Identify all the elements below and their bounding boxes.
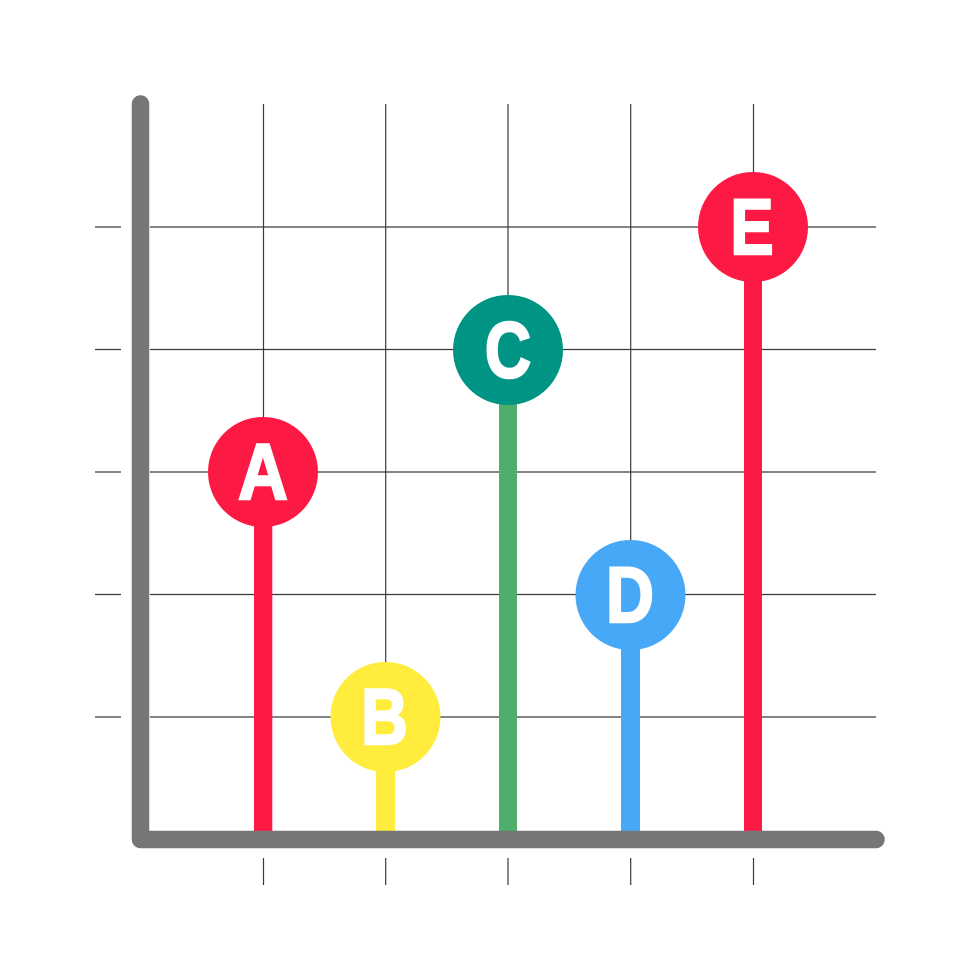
marker D	[576, 540, 686, 650]
bar E	[744, 227, 762, 832]
axes	[140, 104, 876, 840]
marker C: C	[485, 307, 531, 395]
marker A	[208, 417, 318, 527]
marker A: A	[238, 428, 288, 516]
marker C	[453, 295, 563, 405]
marker E	[698, 172, 808, 282]
bar C	[499, 350, 517, 832]
marker E: E	[730, 184, 774, 271]
bar B	[376, 717, 395, 832]
bar A	[254, 472, 272, 832]
marker B: B	[361, 674, 408, 761]
bar D	[621, 595, 640, 832]
marker D: D	[606, 552, 654, 639]
marker B	[330, 662, 440, 772]
